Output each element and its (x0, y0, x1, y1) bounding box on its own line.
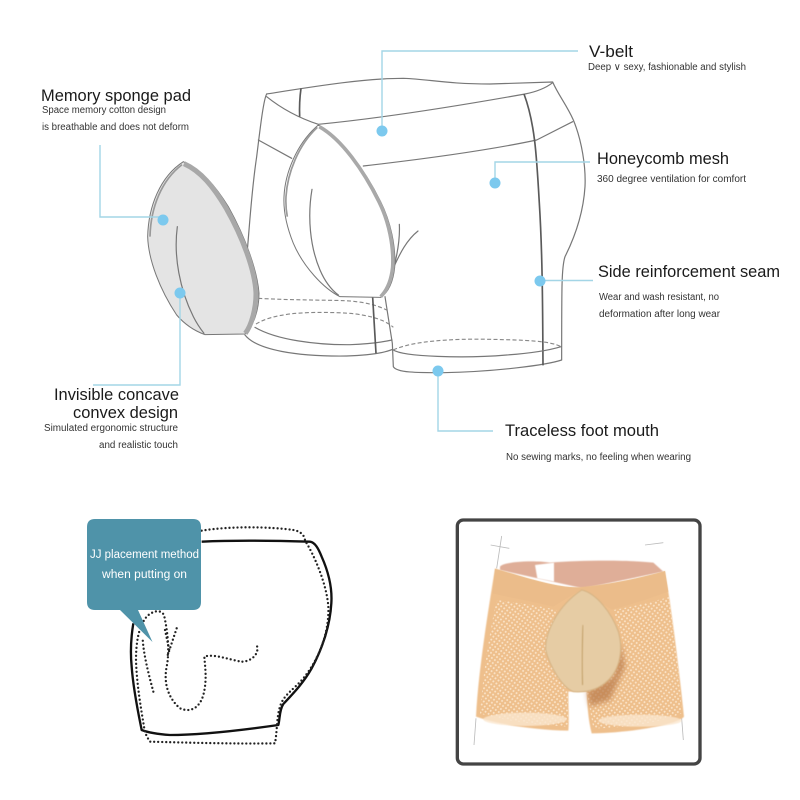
callout: Side reinforcement seam: Wear and wash resistant, no (599, 292, 719, 303)
callout: V-belt: V-belt (589, 42, 633, 61)
photo: mesh texture (480, 597, 682, 728)
photo: back of waistband (500, 561, 663, 588)
solid shorts outline (131, 541, 331, 735)
boxer shorts line drawing (245, 78, 585, 373)
photo: hem highlights (483, 713, 567, 726)
fitted pad on shorts (284, 125, 395, 297)
callout: Traceless foot mouth: Traceless foot mouth (505, 421, 659, 440)
callout: Memory sponge pad: Memory sponge pad (41, 86, 191, 105)
callout: Invisible concave convex design: and realistic touch (99, 440, 178, 451)
callout: Side reinforcement seam: deformation after long wear (599, 309, 721, 320)
callout: Honeycomb mesh: 360 degree ventilation for comfort (597, 174, 746, 185)
callout: Memory sponge pad (41, 86, 191, 226)
callout: Memory sponge pad: Space memory cotton design (42, 105, 166, 116)
placement method diagram (131, 527, 331, 744)
callout: Honeycomb mesh: Honeycomb mesh (597, 149, 729, 168)
callout bubble: JJ placement method: when putting on (101, 569, 187, 581)
callout: Honeycomb mesh (490, 149, 746, 188)
callout: Invisible concave convex design: convex design (73, 403, 178, 422)
dotted outline offset (136, 527, 328, 744)
photo: crotch shadow (587, 643, 625, 707)
photo: pad (546, 590, 621, 692)
near leg hem (393, 347, 561, 357)
callout: Invisible concave convex design (44, 288, 186, 451)
callout: V-belt (376, 42, 746, 136)
waistband and outer outline (267, 78, 585, 373)
callout: Invisible concave convex design: Invisible concave (54, 385, 179, 404)
callout: V-belt: Deep ∨ sexy, fashionable and stylish (588, 62, 746, 73)
callout bubble: JJ placement method: JJ placement method (90, 549, 199, 561)
detached memory sponge pad (148, 162, 259, 335)
callout: Memory sponge pad: is breathable and does not deform (42, 122, 189, 133)
mannequin stand traces (474, 536, 683, 745)
side reinforcement seam (524, 94, 543, 365)
crotch folds (394, 224, 418, 267)
callout: Side reinforcement seam (534, 262, 780, 320)
product photo frame (457, 520, 700, 764)
callout: Side reinforcement seam: Side reinforcement seam (598, 262, 780, 281)
callout: Traceless foot mouth (432, 366, 691, 463)
photo: waistband band (493, 569, 668, 609)
photo: shorts body (476, 568, 684, 733)
callout: Invisible concave convex design: Simulated ergonomic structure (44, 423, 178, 434)
callout bubble: JJ placement method (87, 519, 201, 642)
callout: Traceless foot mouth: No sewing marks, no feeling when wearing (506, 452, 691, 463)
far leg hem (245, 335, 393, 356)
